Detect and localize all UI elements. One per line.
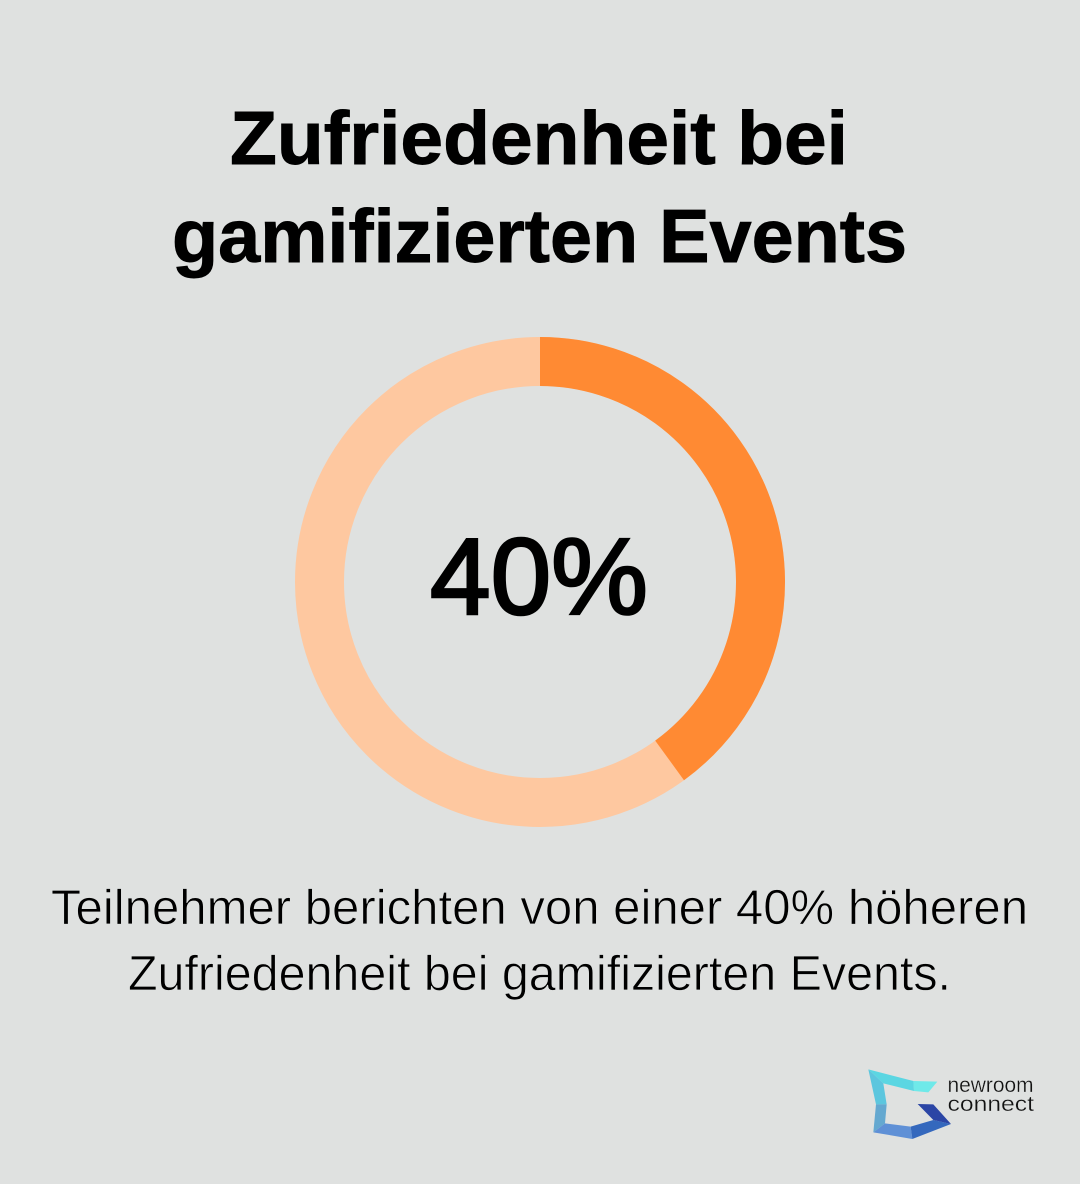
logo wordmark (948, 1074, 1034, 1116)
title: gamifizierten Events (172, 194, 907, 278)
description text: Zufriedenheit bei gamifizierten Events. (128, 947, 951, 1001)
description text (51, 881, 1028, 1001)
logo: newroom connect (868, 1069, 1034, 1139)
donut chart: 40 percent (320, 362, 761, 802)
description text: Teilnehmer berichten von einer 40% höheren (51, 881, 1028, 935)
title: Zufriedenheit bei (230, 96, 848, 180)
logo wordmark: connect (948, 1093, 1034, 1116)
title (172, 96, 907, 278)
logo wordmark: newroom (948, 1074, 1034, 1097)
icon: logo mark (868, 1069, 951, 1139)
donut value: 40% (430, 516, 648, 638)
